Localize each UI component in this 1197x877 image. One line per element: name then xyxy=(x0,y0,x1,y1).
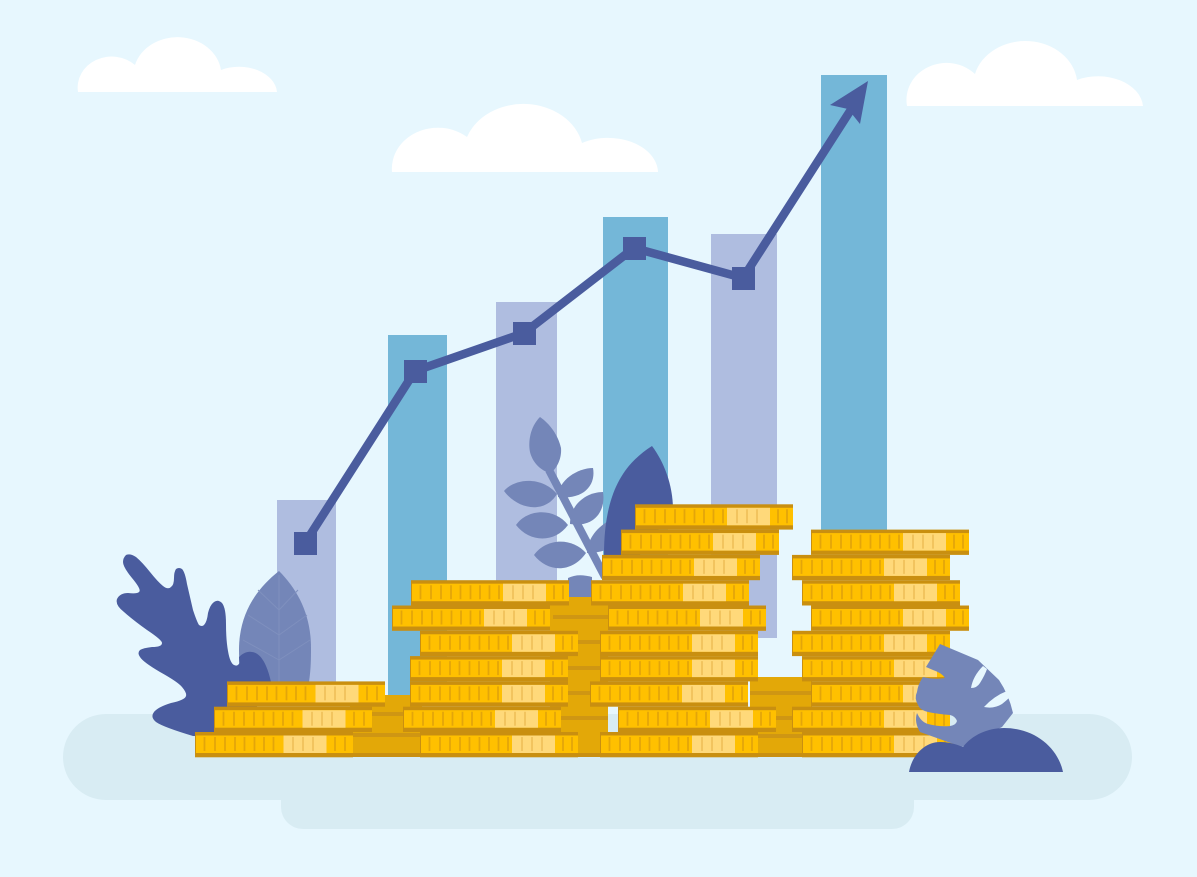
coin stack: left xyxy=(195,681,385,757)
coin stack: tall centre xyxy=(590,504,793,757)
icon: dark leaf behind coins xyxy=(604,446,673,555)
icon: fern branch xyxy=(504,417,610,597)
icon: dark mound xyxy=(909,728,1063,772)
icon: veined leaf xyxy=(239,571,311,682)
icon: monstera leaf xyxy=(916,644,1013,747)
coin stack: second xyxy=(392,580,578,757)
coin stack: right xyxy=(792,530,969,757)
clouds xyxy=(78,37,1143,172)
back coin piles xyxy=(350,597,812,757)
bar chart xyxy=(277,75,887,695)
icon: dark oak leaf xyxy=(117,554,271,737)
ground shadow xyxy=(63,714,1132,829)
trend line with arrow xyxy=(294,81,868,555)
